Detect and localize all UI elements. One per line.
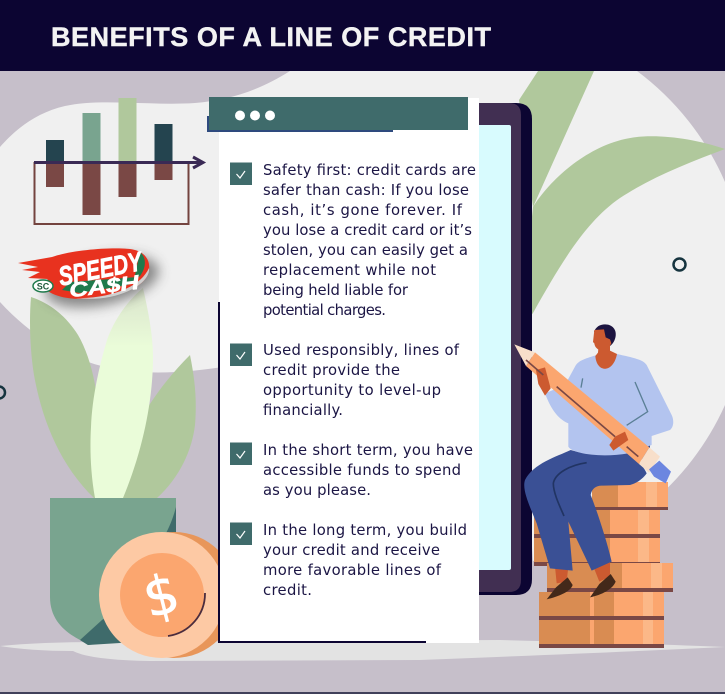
logo: Speedy Cash: SPEEDY	[56, 246, 147, 292]
ground shadow	[0, 640, 725, 661]
bar chart	[34, 98, 203, 224]
content panel	[207, 97, 479, 643]
bullet 1: safety first: Safety first: credit cards are	[263, 162, 476, 179]
bullet 1: safety first: cash, it’s gone forever. If	[263, 202, 463, 219]
bullet 4: long term: In the long term, you build	[263, 522, 467, 539]
bullet 2: used responsibly: opportunity to level-up	[263, 382, 441, 399]
decorative ring right	[674, 258, 686, 270]
dollar coin	[99, 532, 237, 658]
bullet 4: long term: your credit and receive	[263, 542, 440, 559]
bullet 2: used responsibly	[230, 342, 460, 419]
bullet 2: used responsibly: Used responsibly, lines of	[263, 342, 460, 359]
plant pot	[50, 498, 176, 645]
coin stack	[534, 482, 673, 648]
logo: Speedy Cash: CA$H	[68, 272, 141, 302]
bullet 1: safety first: potential charges.	[263, 302, 386, 319]
dollar coin: $	[137, 561, 185, 630]
bullet 1: safety first: stolen, you can easily get a	[263, 242, 468, 259]
decorative ring left	[0, 386, 5, 398]
background blob	[0, 71, 725, 561]
bullet 2: used responsibly: credit provide the	[263, 362, 400, 379]
bullet 1: safety first: replacement while not	[263, 262, 436, 279]
person with pencil	[514, 324, 673, 599]
plant	[30, 288, 196, 498]
logo: Speedy Cash: SC	[37, 282, 50, 292]
bullet 4: long term: more favorable lines of	[263, 562, 442, 579]
bottom edge line	[0, 692, 725, 694]
header bar	[0, 0, 725, 71]
logo: Speedy Cash	[18, 245, 164, 317]
bullet 1: safety first	[230, 162, 476, 319]
bullet 3: short term: In the short term, you have	[263, 442, 473, 459]
bullet 2: used responsibly: financially.	[263, 402, 343, 419]
bullet 3: short term: as you please.	[263, 482, 371, 499]
bullet 4: long term	[230, 522, 467, 599]
bullet 4: long term: credit.	[263, 582, 312, 599]
bullet 1: safety first: safer than cash: If you lose	[263, 182, 469, 199]
bullet 1: safety first: you lose a credit card or it’s	[263, 222, 472, 239]
tablet device	[470, 103, 532, 595]
bullet 1: safety first: being held liable for	[263, 282, 409, 299]
bullet 3: short term: accessible funds to spend	[263, 462, 461, 479]
title: BENEFITS OF A LINE OF CREDIT	[51, 22, 492, 52]
background leaves	[519, 71, 725, 330]
bullet 3: short term	[230, 442, 473, 499]
